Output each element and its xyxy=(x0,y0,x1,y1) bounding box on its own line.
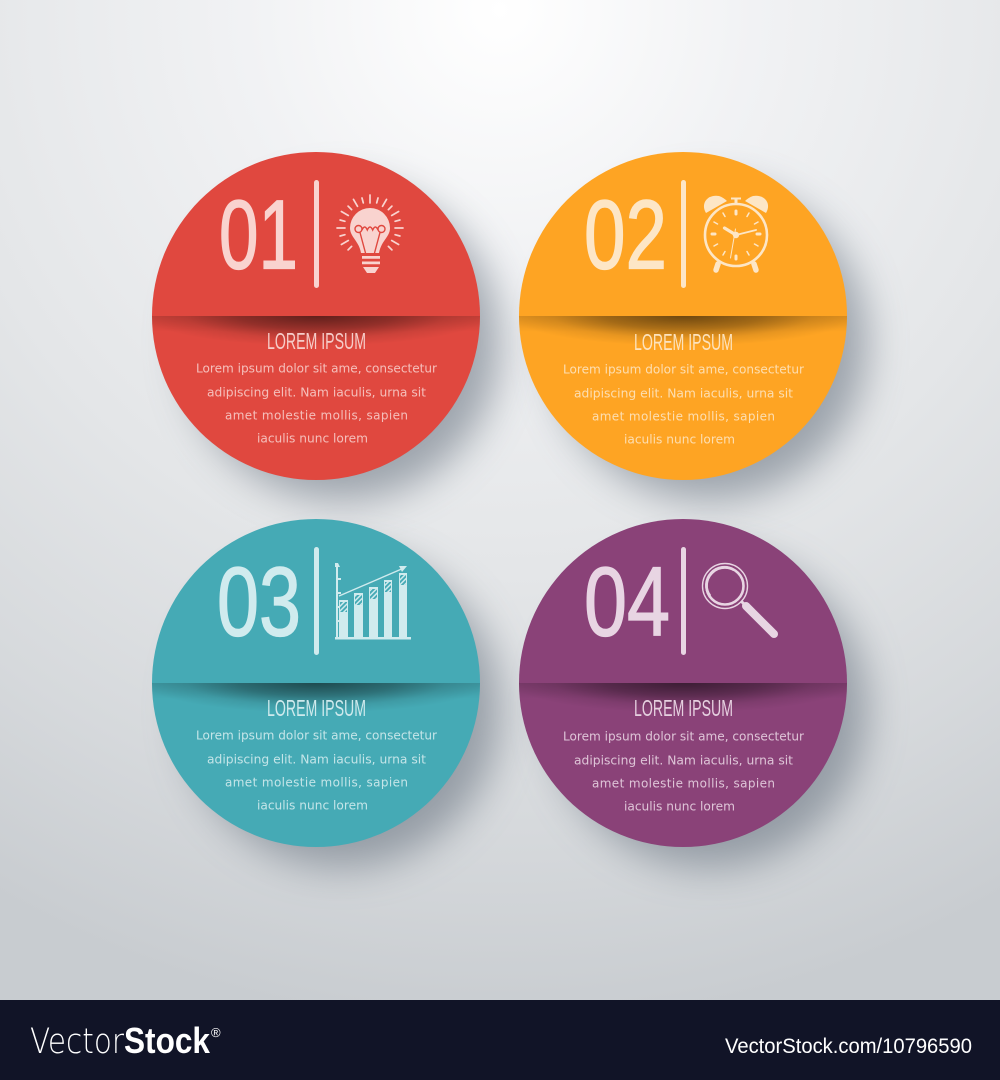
panel 04: purple circle xyxy=(511,519,867,867)
icon: magnifying glass xyxy=(702,564,774,634)
image id: VectorStock.com/10796590 xyxy=(725,1035,972,1058)
body text: iaculis nunc lorem xyxy=(257,432,368,446)
heading: LOREM IPSUM xyxy=(634,695,733,721)
body text xyxy=(196,362,437,446)
body text: amet molestie mollis, sapien xyxy=(225,408,408,422)
body text: Lorem ipsum dolor sit ame, consectetur xyxy=(563,362,804,376)
body text: amet molestie mollis, sapien xyxy=(592,410,775,424)
body text: amet molestie mollis, sapien xyxy=(592,776,775,790)
body text: amet molestie mollis, sapien xyxy=(225,776,408,790)
icon: alarm clock xyxy=(704,196,768,270)
body text: iaculis nunc lorem xyxy=(624,800,735,814)
body text: adipiscing elit. Nam iaculis, urna sit xyxy=(207,752,426,766)
body text: iaculis nunc lorem xyxy=(624,432,735,446)
body text: adipiscing elit. Nam iaculis, urna sit xyxy=(574,386,793,400)
body text: adipiscing elit. Nam iaculis, urna sit xyxy=(574,754,793,768)
watermark logo: Vector xyxy=(30,1022,125,1062)
body text: Lorem ipsum dolor sit ame, consectetur xyxy=(196,728,437,742)
body text: adipiscing elit. Nam iaculis, urna sit xyxy=(207,386,426,400)
watermark logo: ® xyxy=(211,1025,221,1040)
heading: LOREM IPSUM xyxy=(267,695,366,721)
body text: iaculis nunc lorem xyxy=(257,798,368,812)
icon: light bulb xyxy=(337,195,403,273)
number 02: 02 xyxy=(584,180,667,290)
body text xyxy=(563,362,804,446)
number 03: 03 xyxy=(217,546,301,656)
body text xyxy=(563,730,804,814)
watermark logo xyxy=(30,1020,221,1062)
panel 02: orange circle xyxy=(511,152,867,500)
heading: LOREM IPSUM xyxy=(267,328,366,354)
heading: LOREM IPSUM xyxy=(634,329,733,355)
number 04: 04 xyxy=(584,546,670,656)
icon: bar chart xyxy=(335,563,411,640)
number 01: 01 xyxy=(219,180,298,290)
footer bar xyxy=(0,1000,1000,1080)
body text xyxy=(196,728,437,812)
body text: Lorem ipsum dolor sit ame, consectetur xyxy=(196,362,437,376)
body text: Lorem ipsum dolor sit ame, consectetur xyxy=(563,730,804,744)
panel 03: teal circle xyxy=(144,519,500,867)
watermark logo: Stock xyxy=(124,1020,211,1061)
panel 01: red circle xyxy=(144,152,500,500)
